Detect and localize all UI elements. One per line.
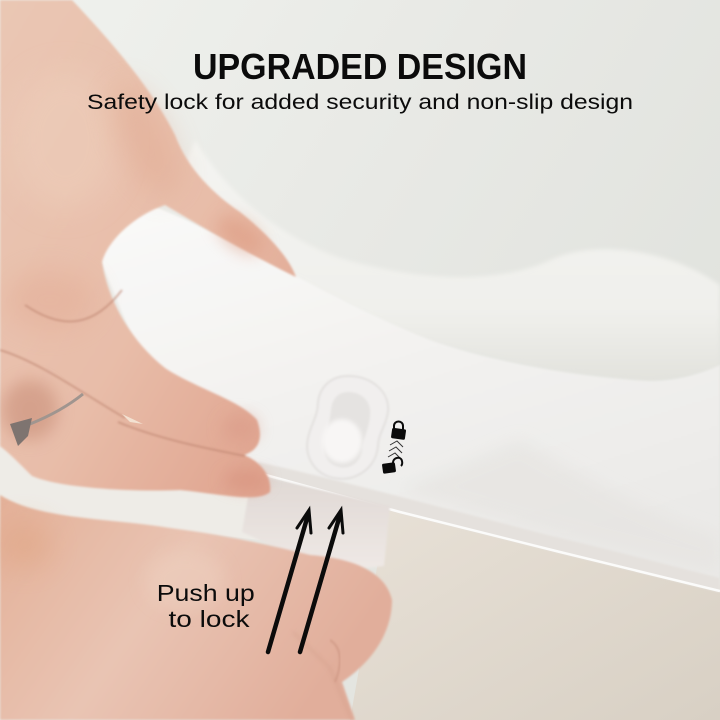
ring xyxy=(10,394,83,446)
label: push up to lock: Push up xyxy=(157,580,255,606)
icon: open lock xyxy=(382,458,402,474)
finger creases xyxy=(0,290,245,456)
icon: closed lock xyxy=(391,422,406,440)
arrow: right xyxy=(300,510,343,652)
upper hand xyxy=(0,0,296,497)
lower hand xyxy=(0,495,392,720)
finger shading xyxy=(211,209,269,261)
slider tab below seat xyxy=(242,474,390,572)
title: UPGRADED DESIGN xyxy=(193,46,527,87)
lock slider xyxy=(307,376,388,479)
subtitle: Safety lock for added security and non-slip design xyxy=(87,91,633,114)
arrow: left xyxy=(268,510,311,652)
label: push up to lock: to lock xyxy=(168,606,250,632)
white seat foreground xyxy=(90,205,720,592)
background toilet seat rim xyxy=(170,140,720,382)
icon: chevrons xyxy=(388,441,403,459)
icon: lock and unlock with chevrons xyxy=(382,422,406,474)
